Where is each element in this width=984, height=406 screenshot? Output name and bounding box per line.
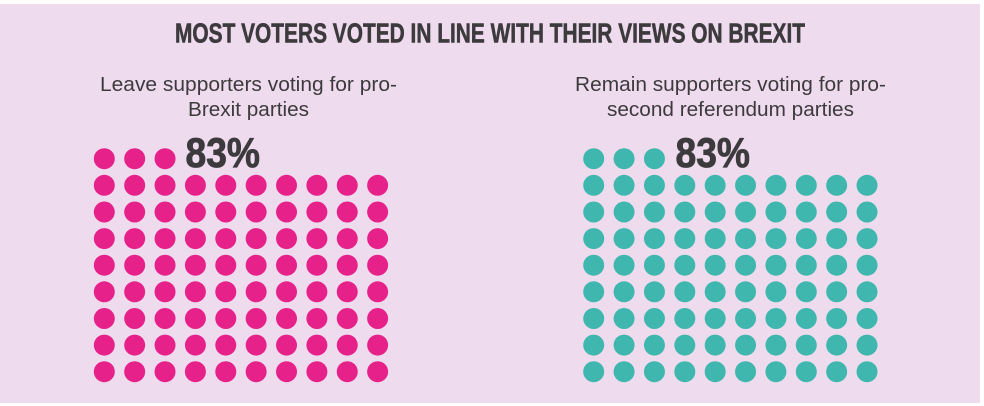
big number: leave 83%: 83% [186, 129, 260, 176]
text block: leave supporters caption [100, 74, 397, 121]
big number: remain 83%: 83% [676, 129, 750, 176]
text block: leave supporters caption: Brexit parties [188, 99, 309, 121]
dot chart: remain 83 of 100 [594, 159, 868, 372]
panel: leave supporters [100, 74, 397, 372]
text block: remain supporters caption: second referendum parties [607, 99, 854, 121]
text block: remain supporters caption [575, 74, 886, 121]
dot chart: leave 83 of 100 [104, 159, 379, 372]
text block: remain supporters caption: Remain supporters voting for pro- [575, 74, 886, 96]
panel: remain supporters [575, 74, 886, 372]
text block: leave supporters caption: Leave supporters voting for pro- [100, 74, 397, 96]
